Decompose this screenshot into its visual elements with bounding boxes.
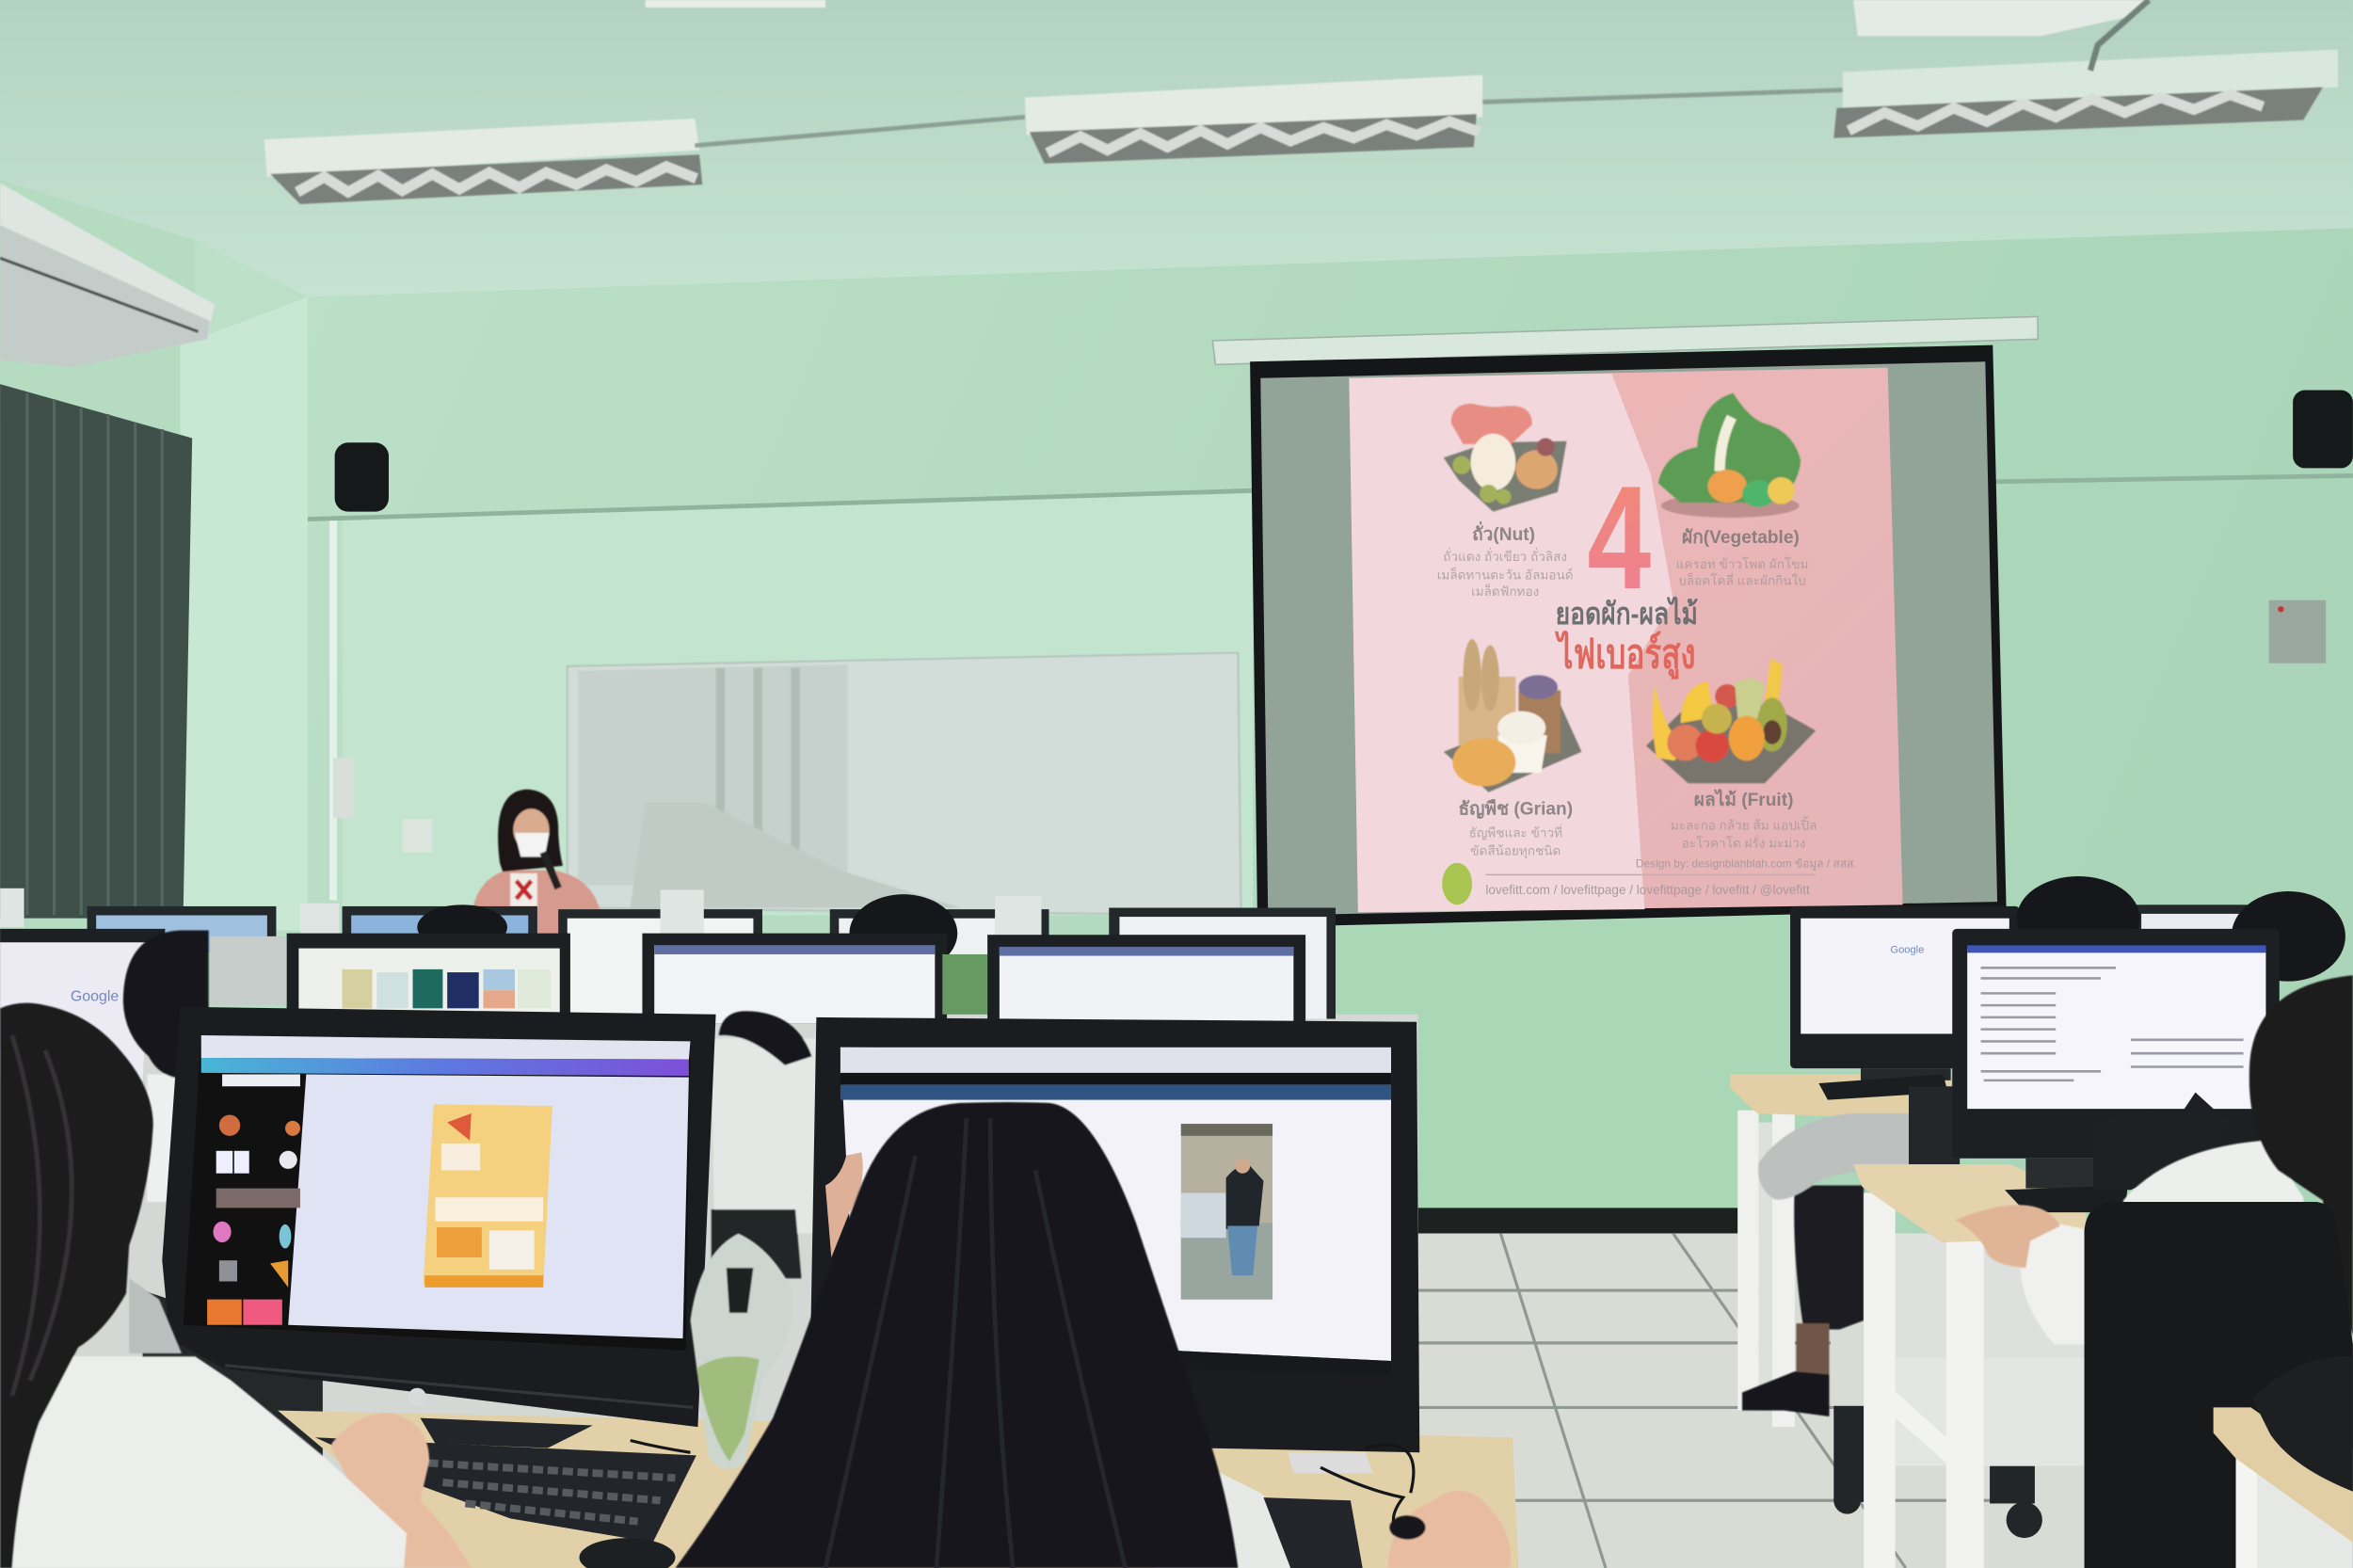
chin highlight bbox=[225, 1366, 694, 1407]
student right bbox=[1955, 975, 2353, 1344]
long black hair bbox=[676, 1102, 1238, 1568]
light 3 bbox=[1833, 50, 2338, 138]
front left student bbox=[0, 1003, 472, 1568]
handbag bbox=[2093, 1093, 2229, 1190]
keyboard right bbox=[1263, 1497, 1363, 1568]
grey jacket bbox=[1758, 1113, 1916, 1200]
far monitor 3 bbox=[558, 909, 762, 1017]
slide heading bbox=[1555, 455, 1698, 680]
label: vegetable: บล็อคโคลี่ และผักกินใบ bbox=[1678, 572, 1806, 588]
label: nut: เมล็ดฟักทอง bbox=[1471, 583, 1539, 599]
sidebar bbox=[207, 1074, 300, 1325]
slide footer: lovefitt.com / lovefittpage / lovefittpage / lovefitt / @lovefitt bbox=[1485, 883, 1810, 897]
monitor: google left: Google bbox=[71, 988, 119, 1004]
slide bbox=[1349, 368, 1903, 912]
label: nut: เมล็ดทานตะวัน อัลมอนด์ bbox=[1437, 566, 1574, 582]
label: vegetable: แครอท ข้าวโพด ผักโขม bbox=[1676, 556, 1808, 571]
dark chair bbox=[1909, 1086, 1960, 1164]
food icon: fruit bbox=[1646, 659, 1816, 783]
food icon: vegetables bbox=[1658, 393, 1801, 518]
arm and hand bbox=[331, 1414, 472, 1568]
desks right bbox=[1730, 876, 2353, 1568]
shadowed room base behind front row bbox=[0, 1015, 1418, 1568]
number four: 4 bbox=[1587, 455, 1651, 619]
monitor: document 1 bbox=[642, 934, 987, 1023]
hand right bbox=[1388, 1491, 1511, 1568]
ceiling lights bbox=[264, 0, 2338, 204]
paper sheets bbox=[0, 888, 1042, 937]
paper sheet bbox=[210, 936, 287, 1005]
white shirt bbox=[1156, 1463, 1343, 1568]
hand bbox=[1955, 1205, 2060, 1268]
skirting bbox=[1418, 1208, 1737, 1233]
hp logo bbox=[408, 1388, 426, 1406]
front right monitor bbox=[810, 1017, 1419, 1474]
blue nav bar bbox=[840, 1085, 1391, 1100]
left side wall bbox=[180, 297, 308, 930]
keyboard left bbox=[315, 1437, 696, 1543]
light 1 bbox=[264, 119, 702, 204]
air conditioner bbox=[0, 183, 215, 368]
light 2 bbox=[1025, 75, 1482, 164]
photo on screen bbox=[1181, 1124, 1273, 1300]
label: nut: ถั่ว(Nut) bbox=[1472, 521, 1535, 545]
monitor right 1: Google bbox=[1890, 944, 1924, 955]
lower wall panel behind whiteboard bbox=[343, 492, 1253, 915]
front centre student bbox=[676, 1102, 1343, 1568]
wall rail bbox=[308, 475, 2353, 901]
window blind bbox=[0, 384, 192, 919]
ceiling strip bbox=[646, 0, 825, 8]
front stand left bbox=[420, 1418, 593, 1448]
middle row of monitors bbox=[0, 929, 1305, 1080]
presenter bbox=[472, 790, 601, 936]
canva toolbar bbox=[201, 1058, 689, 1076]
slide footer bbox=[1442, 856, 1857, 904]
label: grain: ธัญพืชและ ข้าวที่ bbox=[1469, 824, 1562, 840]
sleeve bbox=[2021, 1223, 2099, 1344]
long black hair bbox=[0, 1003, 153, 1568]
black nav bar bbox=[840, 1073, 1391, 1085]
hair bbox=[2249, 975, 2353, 1336]
browser tabs bbox=[201, 1035, 690, 1060]
food icon: grains bbox=[1444, 639, 1581, 792]
heading line 2: ไฟเบอร์สูง bbox=[1555, 630, 1696, 680]
label: grain: ขัดสีน้อยทุกชนิด bbox=[1470, 844, 1561, 859]
label: vegetable: ผัก(Vegetable) bbox=[1682, 528, 1800, 548]
monitor right 2 bbox=[1952, 929, 2280, 1212]
trousers bbox=[1794, 1185, 1864, 1330]
label: nut: ถั่วแดง ถั่วเขียว ถั่วลิสง bbox=[1443, 548, 1567, 564]
heading line 1: ยอดผัก-ผลไม้ bbox=[1556, 597, 1698, 632]
dark office chair bbox=[2085, 1202, 2353, 1568]
monitor: canva templates bbox=[287, 934, 570, 1015]
conduit bbox=[695, 90, 1843, 146]
label: vegetable bbox=[1676, 528, 1808, 588]
label: grain: ธัญพืช (Grian) bbox=[1459, 799, 1573, 820]
far monitor 4 bbox=[830, 909, 1048, 1015]
poster on screen bbox=[424, 1104, 552, 1288]
cables bbox=[631, 1440, 1414, 1535]
white sweater back bbox=[2123, 1141, 2303, 1242]
label: nut bbox=[1437, 521, 1574, 599]
canvas area bbox=[288, 1074, 689, 1338]
label: grain bbox=[1459, 799, 1573, 859]
floor bbox=[1418, 1233, 2353, 1568]
label: fruit: ผลไม้ (Fruit) bbox=[1694, 789, 1793, 810]
wall below screen bbox=[1336, 915, 1801, 1208]
far monitor 5 bbox=[1109, 908, 1336, 1019]
whiteboard bbox=[568, 653, 1241, 915]
front desk bbox=[278, 1411, 1518, 1568]
food icon: nuts bbox=[1444, 404, 1567, 512]
white shirt bbox=[0, 1356, 407, 1568]
front left monitor bbox=[162, 1007, 716, 1427]
back wall bbox=[195, 228, 2353, 1238]
stand base bbox=[1288, 1452, 1373, 1474]
far heads bbox=[417, 894, 957, 972]
far monitor 1 bbox=[88, 906, 276, 952]
monitor right 1 bbox=[1790, 906, 2020, 1100]
wall box bbox=[2269, 600, 2326, 664]
monitor: google left bbox=[0, 929, 165, 1080]
back student centre bbox=[712, 1011, 816, 1278]
ceiling bbox=[0, 0, 2353, 297]
plastic bag with vegetables bbox=[690, 1233, 793, 1469]
wall switch bbox=[333, 758, 432, 853]
raised hand bbox=[825, 1152, 863, 1257]
label: fruit: มะละกอ กล้วย ส้ม แอปเปิ้ล bbox=[1671, 816, 1817, 833]
far row of monitors bbox=[0, 888, 1336, 1019]
silver bag beside student bbox=[129, 1278, 182, 1353]
student right grey jacket and legs bbox=[1742, 1113, 1916, 1416]
slide footer: Design by: designblahblah.com ข้อมูล / สสส. bbox=[1636, 856, 1857, 871]
speaker right bbox=[2293, 391, 2353, 468]
back student left bbox=[123, 930, 209, 1202]
projection screen bbox=[1250, 345, 2007, 927]
mouse bbox=[579, 1538, 676, 1568]
shin bbox=[1796, 1323, 1830, 1376]
desk 1 bbox=[1730, 1074, 1951, 1427]
monitor: document 2 bbox=[987, 935, 1305, 1025]
speaker left bbox=[335, 442, 389, 512]
label: fruit bbox=[1671, 789, 1817, 851]
projection screen housing bbox=[1212, 316, 2038, 364]
far monitor 2 bbox=[343, 906, 537, 952]
far monitor right bbox=[2134, 904, 2250, 932]
label: fruit: อะโวคาโด ฝรั่ง มะม่วง bbox=[1682, 835, 1806, 851]
desk 3 bbox=[2214, 1356, 2353, 1568]
heads right bbox=[2017, 876, 2345, 982]
chair base bbox=[1833, 1406, 2042, 1538]
sock bbox=[1742, 1371, 1830, 1416]
projector bbox=[1853, 0, 2149, 71]
desk 2 bbox=[1853, 1164, 2088, 1568]
